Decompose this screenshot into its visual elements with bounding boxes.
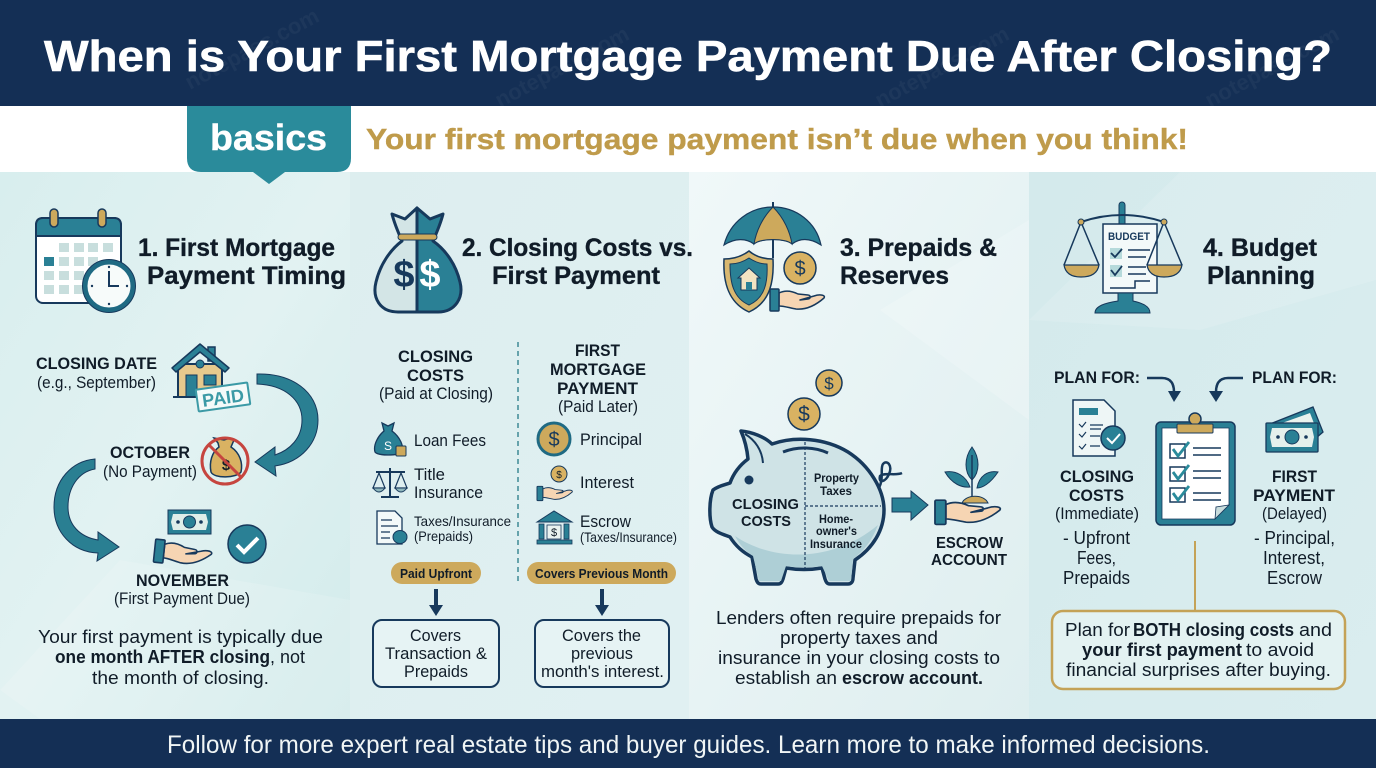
- label: escrow account: [931, 535, 1007, 569]
- item: interest: Interest: [580, 473, 634, 492]
- piggy bank: Insurance: [810, 537, 862, 551]
- panel 4: budget planning: [1052, 202, 1345, 689]
- icon: coins: [788, 370, 842, 430]
- column: closing costs immediate: Prepaids: [1063, 568, 1130, 588]
- icon: split money bag: $: [393, 254, 415, 296]
- label: plan for left: PLAN FOR:: [1054, 368, 1140, 387]
- column heading: closing costs: (Paid at Closing): [379, 384, 493, 403]
- heading 1: [138, 234, 346, 290]
- heading 4: [1203, 234, 1318, 290]
- arrow: to escrow: [892, 491, 928, 520]
- box: covers transaction: [373, 620, 499, 687]
- box: covers transaction: Prepaids: [404, 662, 468, 681]
- icon: cash: [1266, 407, 1323, 452]
- arrow: plan for right: [1209, 378, 1243, 402]
- heading 1: Payment Timing: [147, 262, 346, 290]
- box: covers previous interest: Covers the: [562, 626, 641, 645]
- text: prepaids explanation: Lenders often require prepaids for: [716, 608, 1001, 628]
- text: timing summary: one month AFTER closing: [55, 647, 270, 667]
- text: prepaids explanation: [716, 608, 1001, 688]
- heading 4: Planning: [1207, 262, 1315, 290]
- column: first payment delayed: (Delayed): [1262, 504, 1327, 523]
- arrow: plan for left: [1147, 378, 1181, 402]
- item: title insurance: [373, 465, 483, 502]
- pill: paid upfront: Paid Upfront: [400, 566, 473, 581]
- arrow: down right: [595, 589, 609, 616]
- icon: split money bag: $: [419, 254, 441, 296]
- item: title insurance: Title: [414, 465, 445, 484]
- item: loan fees: Loan Fees: [414, 431, 486, 450]
- october label: (No Payment): [103, 462, 197, 481]
- column heading: first mortgage payment: (Paid Later): [558, 397, 638, 416]
- column heading: first mortgage payment: MORTGAGE: [550, 360, 646, 379]
- panel: background 3: [689, 172, 1029, 719]
- piggy bank: owner's: [816, 524, 857, 538]
- icon: budget scale: [1064, 202, 1182, 313]
- header bar: notepass.com: [491, 21, 633, 112]
- item: taxes and insurance: Taxes/Insurance: [414, 513, 511, 529]
- panel 1: payment timing: [36, 209, 346, 688]
- item: principal: Principal: [580, 430, 642, 449]
- heading 4: 4. Budget: [1203, 234, 1318, 262]
- title: When is Your First Mortgage Payment Due After Closing?: [44, 32, 1332, 81]
- column heading: closing costs: [379, 347, 493, 403]
- item: interest: $: [556, 470, 562, 481]
- callout: plan for both: financial surprises after buying.: [1066, 660, 1331, 680]
- item: taxes and insurance: (Prepaids): [414, 528, 473, 544]
- label: plan for right: PLAN FOR:: [1252, 368, 1337, 387]
- piggy bank: Home-: [819, 512, 853, 526]
- column heading: closing costs: CLOSING: [398, 347, 473, 366]
- november label: [114, 571, 250, 608]
- column heading: first mortgage payment: [550, 341, 646, 416]
- closing date label: CLOSING DATE: [36, 354, 157, 373]
- column: first payment delayed: [1253, 467, 1336, 588]
- callout: plan for both: and: [1299, 620, 1332, 640]
- closing date label: [36, 354, 157, 392]
- column: first payment delayed: Interest,: [1263, 548, 1325, 568]
- piggy bank: COSTS: [741, 513, 791, 530]
- column heading: closing costs: COSTS: [407, 366, 464, 385]
- icon: checklist document: [1073, 400, 1125, 456]
- piggy bank: Property: [814, 471, 859, 485]
- callout: plan for both: your first payment: [1082, 640, 1242, 660]
- icon: split money bag: [375, 208, 461, 312]
- november label: (First Payment Due): [114, 589, 250, 608]
- text: timing summary: [38, 627, 323, 688]
- icon: clipboard checklist: [1156, 413, 1235, 525]
- column: closing costs immediate: Fees,: [1077, 548, 1116, 568]
- october label: OCTOBER: [110, 443, 190, 462]
- footer bar: [0, 719, 1376, 768]
- icon: budget scale: BUDGET: [1108, 231, 1150, 243]
- callout: plan for both: [1052, 611, 1345, 689]
- panel 2: closing costs vs first payment: [373, 208, 693, 687]
- item: principal: [538, 423, 642, 455]
- item: escrow: [537, 511, 677, 545]
- item: escrow: Escrow: [580, 512, 632, 531]
- icon: plant in hand: [935, 447, 1000, 524]
- heading 2: First Payment: [492, 262, 661, 290]
- icon: umbrella shield and coin: [724, 202, 824, 312]
- pill: paid upfront: [391, 562, 481, 584]
- subtitle band: [0, 106, 1376, 184]
- header bar: notepass.com: [1201, 21, 1343, 112]
- piggy bank: CLOSING: [732, 496, 799, 513]
- column heading: first mortgage payment: FIRST: [575, 341, 621, 360]
- callout: plan for both: to avoid: [1246, 640, 1314, 660]
- icon: no money bag: $: [222, 457, 231, 474]
- column: first payment delayed: PAYMENT: [1253, 486, 1336, 505]
- text: timing summary: Your first payment is typically due: [38, 627, 323, 647]
- pill: covers previous month: Covers Previous Month: [535, 566, 668, 581]
- item: loan fees: S: [384, 439, 392, 453]
- heading 2: 2. Closing Costs vs.: [462, 234, 693, 262]
- box: covers previous interest: [535, 620, 669, 687]
- footer bar: Follow for more expert real estate tips and buyer guides. Learn more to make informed decisions.: [167, 731, 1210, 759]
- panel: background 4: [1029, 172, 1376, 719]
- text: prepaids explanation: property taxes and: [780, 628, 938, 648]
- icon: calendar and clock: [36, 209, 136, 312]
- callout: plan for both: Plan for: [1065, 620, 1130, 640]
- text: timing summary: , not: [270, 647, 305, 667]
- arrow: october to november: [54, 459, 119, 561]
- column: first payment delayed: Escrow: [1267, 568, 1323, 588]
- box: covers transaction: Transaction &: [385, 644, 488, 663]
- text: prepaids explanation: insurance in your closing costs to: [718, 648, 1000, 668]
- header bar: [0, 0, 1376, 112]
- text: prepaids explanation: establish an: [735, 668, 837, 688]
- item: loan fees: [375, 423, 486, 456]
- heading 3: Reserves: [840, 262, 949, 290]
- box: covers transaction: Covers: [410, 626, 461, 645]
- column: closing costs immediate: [1055, 467, 1139, 588]
- item: title insurance: Insurance: [414, 483, 483, 502]
- box: covers previous interest: previous: [571, 644, 633, 663]
- icon: house with paid stamp: PAID: [201, 385, 245, 411]
- item: principal: $: [548, 429, 560, 451]
- icon: cash in hand with check: [153, 510, 266, 568]
- item: interest: [537, 466, 634, 501]
- piggy bank: Taxes: [820, 484, 852, 498]
- icon: coins: $: [798, 403, 810, 426]
- arrow: down left: [429, 589, 443, 616]
- heading 2: [462, 234, 693, 290]
- heading 3: 3. Prepaids &: [840, 234, 997, 262]
- icon: house with paid stamp: [172, 344, 250, 412]
- october label: [103, 443, 197, 481]
- pill: covers previous month: [527, 562, 676, 584]
- header bar: notepass.com: [871, 21, 1013, 112]
- column: first payment delayed: - Principal,: [1254, 528, 1335, 548]
- box: covers previous interest: month's interest.: [541, 662, 664, 681]
- icon: umbrella shield and coin: $: [794, 258, 806, 280]
- callout: plan for both: BOTH closing costs: [1133, 620, 1294, 640]
- november label: NOVEMBER: [136, 571, 229, 590]
- column: closing costs immediate: COSTS: [1069, 486, 1124, 505]
- item: escrow: (Taxes/Insurance): [580, 529, 677, 545]
- text: prepaids explanation: escrow account.: [842, 668, 983, 688]
- label: escrow account: ACCOUNT: [931, 552, 1007, 569]
- heading 3: [840, 234, 997, 290]
- panel 3: prepaids and reserves: [710, 202, 1007, 688]
- basics tab: [187, 106, 351, 184]
- basics tab: basics: [210, 117, 327, 158]
- column: closing costs immediate: - Upfront: [1063, 528, 1130, 548]
- tagline: Your first mortgage payment isn’t due when you think!: [366, 124, 1188, 156]
- item: taxes and insurance: [377, 511, 511, 544]
- column: closing costs immediate: (Immediate): [1055, 504, 1139, 523]
- icon: no money bag: [202, 438, 248, 484]
- panel: background 1: [0, 172, 350, 719]
- column: first payment delayed: FIRST: [1272, 467, 1318, 486]
- label: escrow account: ESCROW: [936, 535, 1004, 552]
- column heading: first mortgage payment: PAYMENT: [557, 379, 639, 398]
- text: timing summary: the month of closing.: [92, 668, 269, 688]
- item: escrow: $: [551, 527, 557, 539]
- arrow: closing to october: [255, 374, 318, 476]
- column: closing costs immediate: CLOSING: [1060, 467, 1134, 486]
- icon: coins: $: [824, 374, 834, 393]
- panel: background 2: [350, 172, 689, 719]
- piggy bank: [710, 431, 902, 584]
- header bar: notepass.com: [181, 3, 323, 94]
- closing date label: (e.g., September): [37, 373, 156, 392]
- heading 1: 1. First Mortgage: [138, 234, 335, 262]
